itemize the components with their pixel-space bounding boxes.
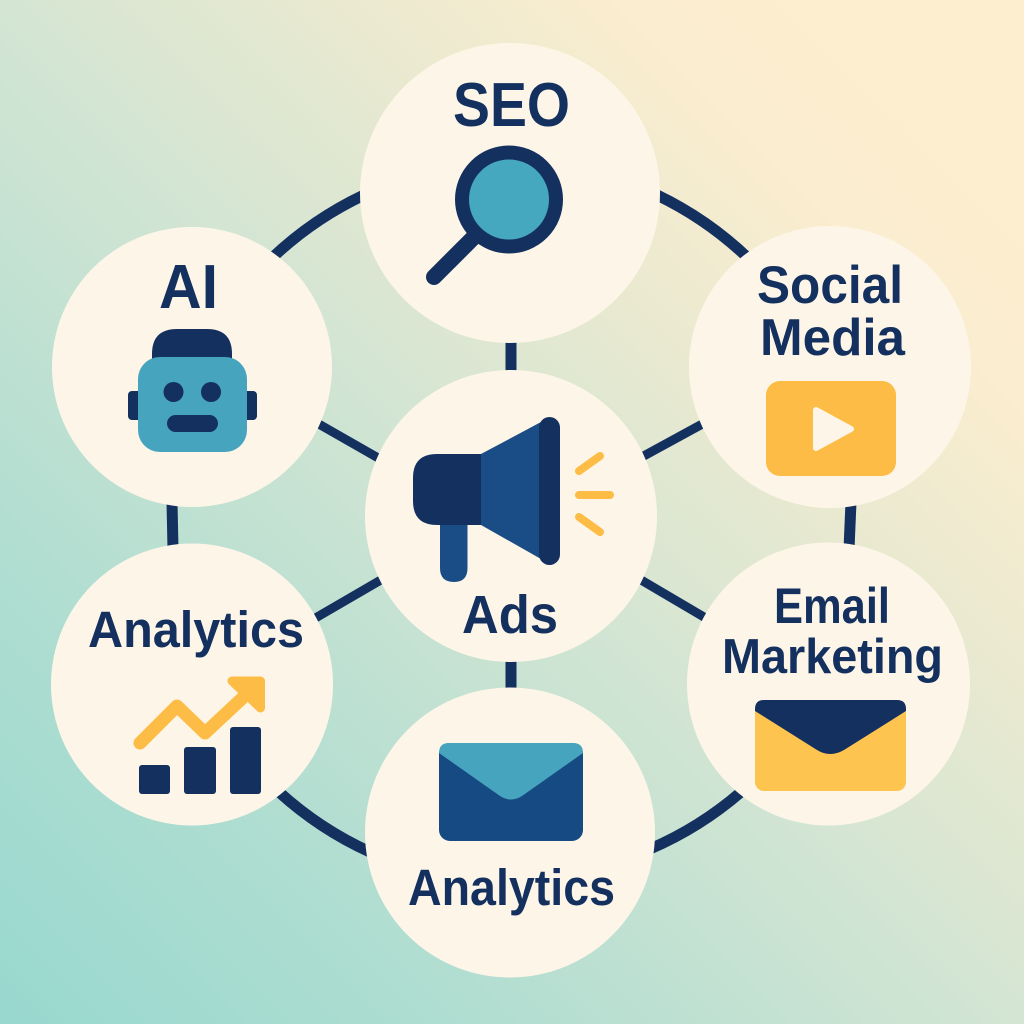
node: Email Marketing (687, 542, 970, 826)
heading: Email Marketing: Marketing (722, 630, 943, 684)
icon: yellow envelope (755, 700, 906, 791)
icon: robot (128, 329, 257, 452)
icon: video play (766, 381, 896, 476)
node: Analytics bottom (365, 688, 655, 978)
icon: growth chart (139, 681, 261, 794)
heading: AI: AI (159, 253, 218, 322)
icon: sound lines (579, 456, 610, 532)
icon: magnifying glass (434, 152, 556, 277)
connector ring and spokes (172, 195, 851, 852)
heading: Social Media (757, 256, 906, 367)
node: AI (52, 227, 332, 507)
heading: Social Media: Media (760, 309, 906, 367)
heading: Email Marketing (722, 578, 943, 684)
node: Ads center (365, 370, 657, 662)
heading: Analytics: Analytics (88, 601, 304, 658)
icon: megaphone (413, 417, 610, 582)
node: Analytics left (51, 544, 333, 826)
heading: SEO: SEO (453, 71, 570, 140)
icon: blue envelope (439, 743, 583, 841)
heading: Email Marketing: Email (774, 578, 890, 634)
heading: Analytics: Analytics (408, 859, 615, 916)
heading: Ads: Ads (462, 585, 558, 645)
node: SEO (360, 43, 660, 343)
node: Social Media (689, 226, 971, 508)
heading: Social Media: Social (757, 256, 903, 315)
